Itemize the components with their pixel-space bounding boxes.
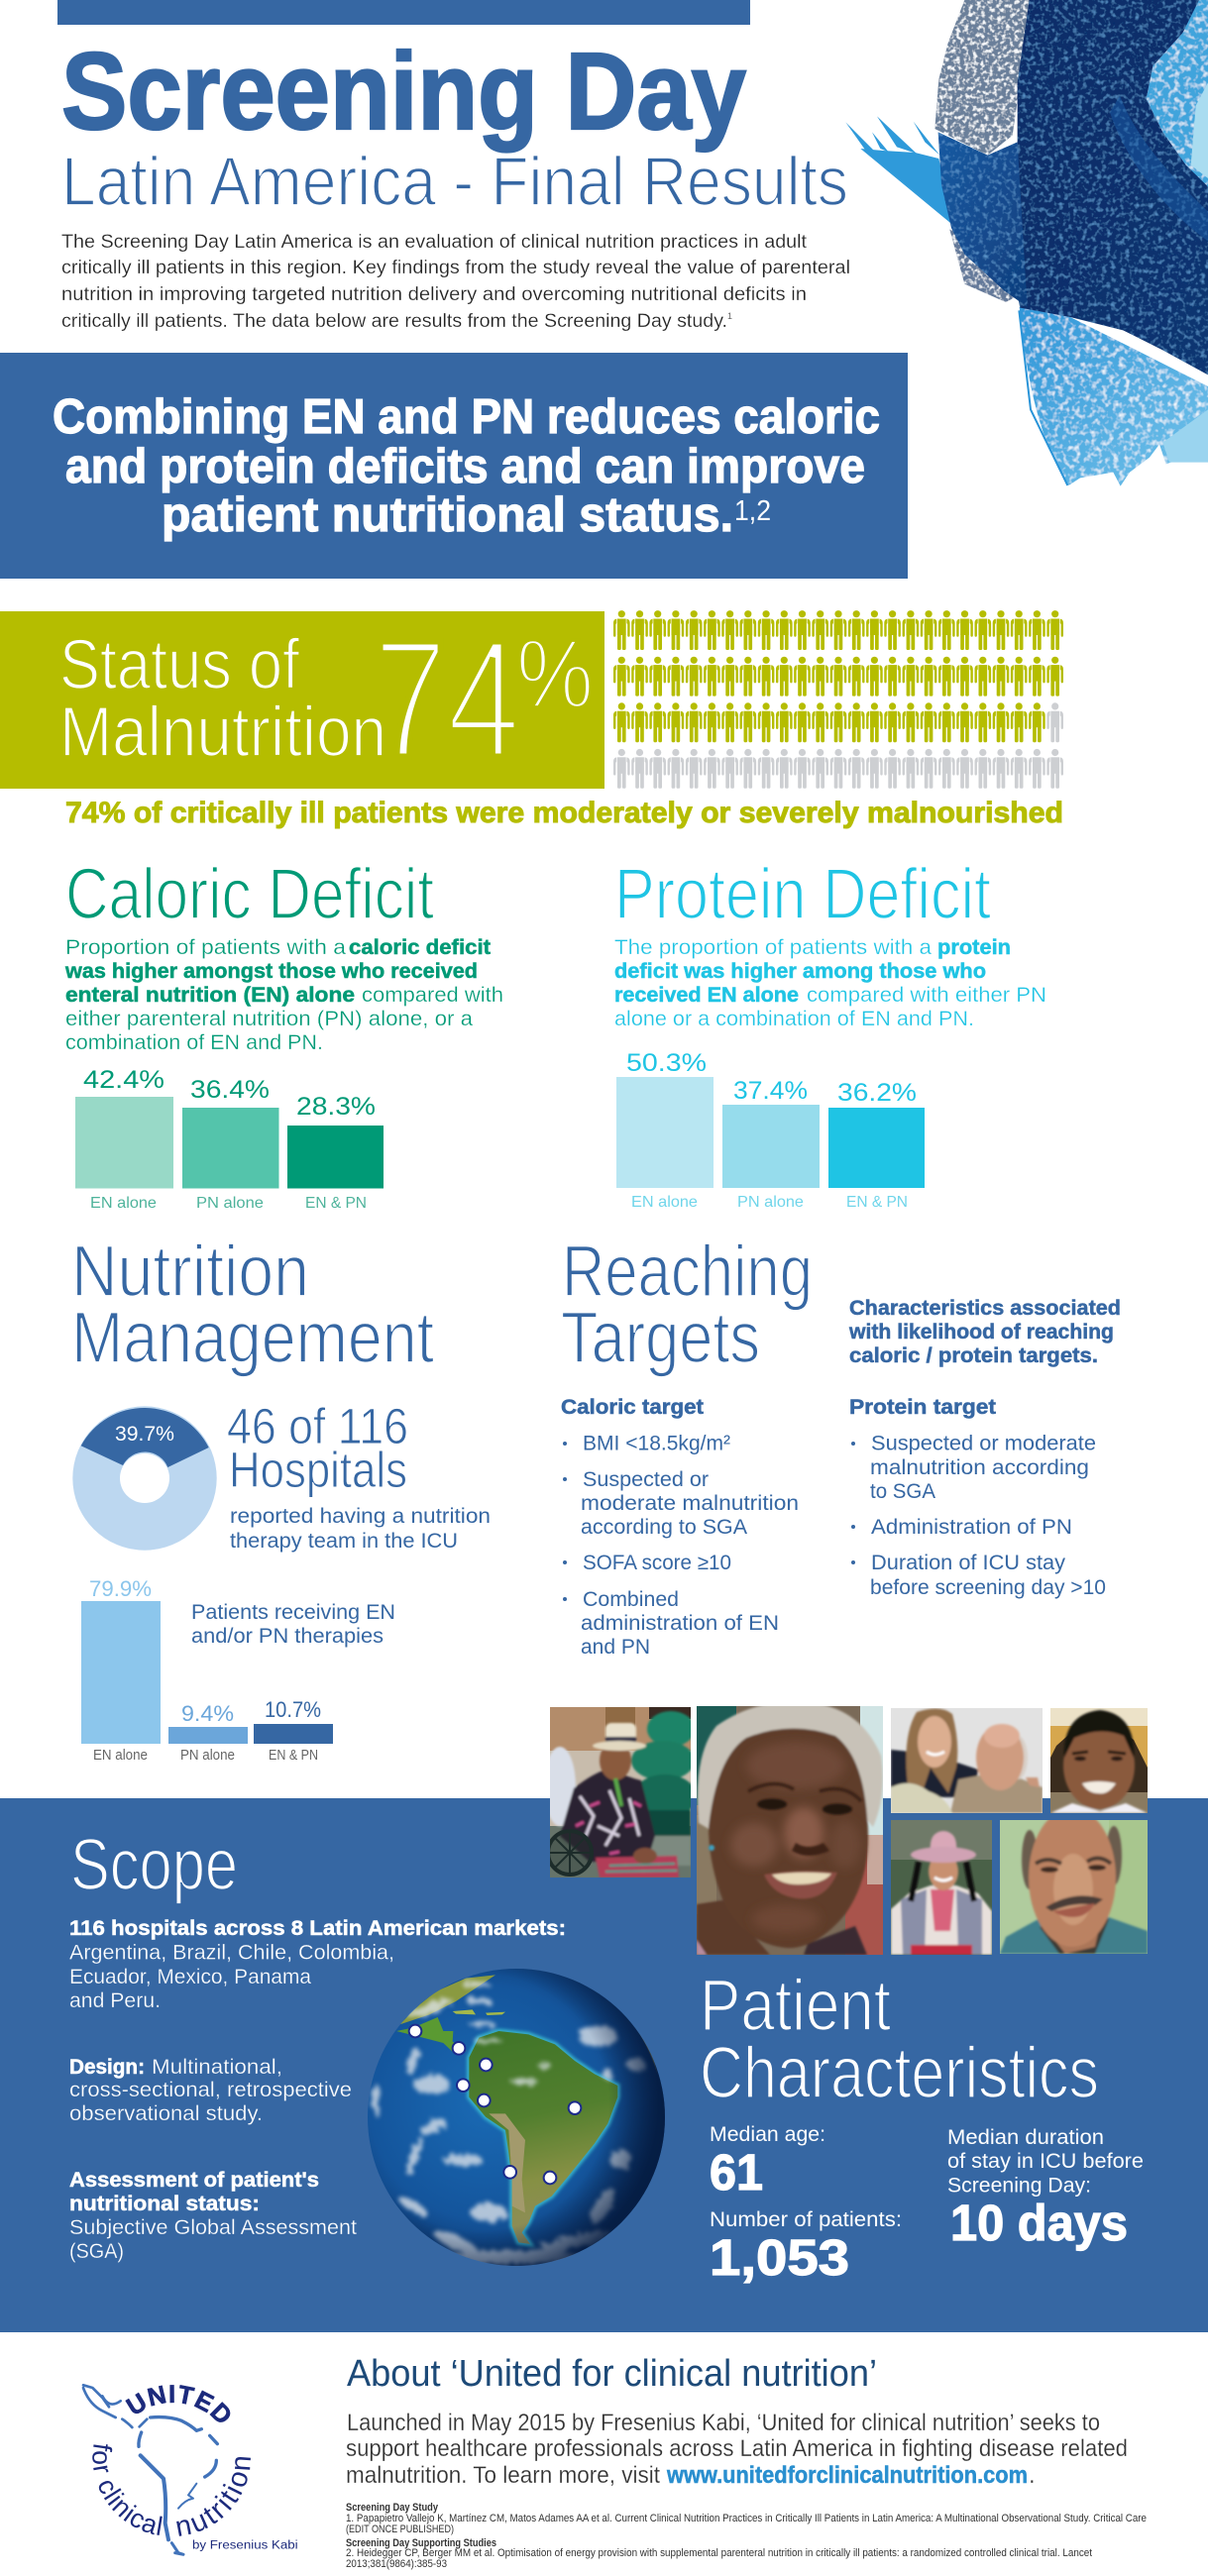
stat: median ICU stay [947, 2126, 1144, 2251]
references: 2. Heidegger CP, Berger MM et al. Optimisation of energy provision with supplemental parenteral nutrition in critically ill patients: a randomized controlled clinical trial. Lancet [346, 2547, 1092, 2559]
globe with market markers [368, 1969, 665, 2266]
scope assessment: Assessment of patient's [69, 2169, 319, 2192]
bar chart: therapies: EN alone [93, 1747, 148, 1764]
logo wordmark: UNITED [125, 2385, 230, 2422]
about text: www.unitedforclinicalnutrition.com [666, 2462, 1028, 2489]
targets intro: with likelihood of reaching [848, 1321, 1114, 1343]
caloric target list [561, 1396, 799, 1659]
panel: caloric deficit [64, 855, 503, 1212]
bar chart: caloric deficit: 28.3% [296, 1093, 376, 1121]
panel: reaching targets [561, 1232, 1121, 1659]
protein deficit text: compared with either PN [807, 984, 1046, 1007]
bar chart: protein deficit: PN alone [737, 1194, 804, 1211]
intro paragraph: The Screening Day Latin America is an evaluation of clinical nutrition practices in adult [61, 232, 808, 253]
stat: number of patients [710, 2208, 902, 2286]
panel: patient characteristics [700, 1966, 1144, 2286]
malnutrition caption: 74% of critically ill patients were moderately or severely malnourished [65, 797, 1063, 829]
panel: nutrition management: Management [71, 1298, 434, 1378]
protein target list: Protein target [849, 1396, 996, 1419]
scope assessment: nutritional status: [69, 2193, 260, 2215]
about text [346, 2410, 1128, 2489]
panel: status of malnutrition: Malnutrition [59, 694, 386, 772]
scope markets [69, 1917, 566, 2012]
hospitals statistic: therapy team in the ICU [230, 1530, 458, 1553]
blue scope band [0, 1798, 1208, 2332]
stat: median age [710, 2123, 825, 2200]
protein target list [849, 1396, 1106, 1599]
bar chart: caloric deficit [75, 1066, 384, 1212]
caloric target list: administration of EN [581, 1612, 779, 1635]
bar chart: protein deficit: 36.2% [837, 1079, 917, 1107]
stat: median age: Median age: [710, 2123, 825, 2146]
therapies caption: Patients receiving EN [191, 1601, 395, 1624]
stat: median ICU stay: Screening Day: [947, 2174, 1091, 2198]
scope design: Multinational, [152, 2056, 282, 2079]
caloric deficit text [64, 936, 503, 1054]
panel: reaching targets: Targets [561, 1298, 760, 1378]
caloric target list: and PN [581, 1636, 650, 1659]
bar chart: protein deficit [616, 1049, 925, 1211]
caloric target list: Combined [583, 1588, 679, 1611]
references: Screening Day Study [346, 2502, 439, 2514]
bar chart: protein deficit: 50.3% [626, 1049, 707, 1077]
panel: reaching targets: Reaching [562, 1232, 813, 1312]
bar chart: protein deficit: EN & PN [846, 1194, 908, 1211]
bar chart: therapies: 10.7% [265, 1697, 321, 1722]
bar chart: therapies: 9.4% [181, 1701, 234, 1726]
protein target list: Suspected or moderate [871, 1433, 1096, 1454]
key message banner: 1,2 [734, 495, 771, 527]
panel: patient characteristics: Patient [700, 1966, 891, 2046]
logo: United for clinical nutrition [81, 2384, 298, 2556]
title: Screening Day [61, 31, 746, 153]
references: (EDIT ONCE PUBLISHED) [346, 2523, 454, 2535]
targets intro: caloric / protein targets. [849, 1344, 1098, 1367]
hospitals statistic [227, 1398, 491, 1553]
protein deficit text [614, 936, 1046, 1030]
intro paragraph [61, 232, 850, 332]
scope design: Design: [69, 2056, 145, 2079]
top accent bar [57, 0, 750, 25]
about text: support healthcare professionals across Latin America in fighting disease related [346, 2435, 1128, 2462]
protein target list: before screening day >10 [870, 1576, 1106, 1599]
about text: malnutrition. To learn more, visit [346, 2462, 660, 2489]
protein deficit text: received EN alone [614, 984, 799, 1007]
pictogram: 74 of 100 patients [613, 610, 1063, 789]
bar chart: caloric deficit: PN alone [196, 1195, 264, 1212]
stat: median age: 61 [710, 2144, 763, 2200]
protein target list: to SGA [870, 1480, 935, 1503]
bar chart: therapies: 79.9% [89, 1576, 152, 1601]
logo wordmark: for clinical [92, 2444, 163, 2535]
panel: scope: Scope [70, 1825, 238, 1905]
caloric target list: Suspected or [583, 1468, 709, 1491]
about text: Launched in May 2015 by Fresenius Kabi, ‘United for clinical nutrition’ seeks to [347, 2410, 1100, 2436]
key message banner: patient nutritional status. [162, 488, 733, 542]
subtitle: Latin America - Final Results [61, 143, 848, 220]
scope design: cross-sectional, retrospective [69, 2079, 352, 2101]
protein target list: malnutrition according [870, 1456, 1089, 1479]
panel: status of malnutrition: Status of [59, 626, 299, 704]
caloric target list: BMI <18.5kg/m² [583, 1433, 730, 1454]
bar chart: protein deficit: 37.4% [733, 1077, 808, 1105]
photo: older man with moustache [1000, 1820, 1148, 1954]
scope design: observational study. [69, 2102, 263, 2125]
stat: median ICU stay: of stay in ICU before [947, 2150, 1144, 2173]
intro paragraph: critically ill patients in this region. Key findings from the study reveal the value of parenteral [61, 258, 850, 278]
scope design [69, 2056, 352, 2125]
caloric deficit text: combination of EN and PN. [65, 1031, 323, 1054]
bar chart: caloric deficit: EN & PN [305, 1195, 367, 1212]
protein deficit text: alone or a combination of EN and PN. [614, 1008, 974, 1030]
logo wordmark [92, 2385, 298, 2552]
scope markets: and Peru. [69, 1989, 161, 2012]
scope assessment: Subjective Global Assessment [69, 2216, 357, 2239]
scope markets: 116 hospitals across 8 Latin American markets: [69, 1917, 566, 1940]
caloric target list: SOFA score ≥10 [583, 1552, 731, 1574]
key message banner: and protein deficits and can improve [65, 440, 865, 493]
donut chart: 39.7%: 39.7% [115, 1423, 174, 1446]
bar chart: protein deficit: EN alone [631, 1194, 698, 1211]
references: Screening Day Supporting Studies [346, 2537, 496, 2549]
intro paragraph: critically ill patients. The data below are results from the Screening Day study. [61, 311, 727, 332]
panel: caloric deficit: Caloric Deficit [65, 855, 434, 934]
logo wordmark: by Fresenius Kabi [192, 2538, 298, 2552]
caloric target list: Caloric target [561, 1396, 704, 1419]
panel: protein deficit [614, 855, 1046, 1211]
references [346, 2502, 1147, 2570]
key message banner [0, 353, 908, 579]
watercolour brush stroke [845, 0, 1208, 486]
photo: man with hat [550, 1707, 691, 1878]
stat: number of patients: Number of patients: [710, 2208, 902, 2231]
references: 2013;381(9864):385-93 [346, 2558, 447, 2570]
targets intro [848, 1297, 1121, 1367]
panel: nutrition management [71, 1232, 491, 1764]
caloric deficit text: Proportion of patients with a [65, 936, 346, 959]
caloric deficit text: compared with [362, 984, 503, 1007]
targets intro: Characteristics associated [849, 1297, 1121, 1320]
stat: number of patients: 1,053 [710, 2229, 849, 2286]
logo map outline [83, 2385, 217, 2554]
protein target list: Administration of PN [871, 1516, 1072, 1539]
title [61, 31, 848, 220]
panel: scope [69, 1825, 566, 2263]
bar chart: therapies [81, 1576, 333, 1764]
hospitals statistic: 46 of 116 [227, 1398, 408, 1454]
heading: about: About ‘United for clinical nutrition’ [347, 2353, 877, 2395]
scope markets: Ecuador, Mexico, Panama [69, 1966, 311, 1988]
bar chart: therapies: EN & PN [269, 1747, 318, 1764]
bar chart: caloric deficit: EN alone [90, 1195, 157, 1212]
caloric target list: moderate malnutrition [581, 1492, 799, 1515]
caloric deficit text: either parenteral nutrition (PN) alone, or a [65, 1008, 473, 1030]
protein target list: Duration of ICU stay [871, 1552, 1066, 1574]
protein deficit text: The proportion of patients with a [614, 936, 932, 959]
stat: median ICU stay: Median duration [947, 2126, 1104, 2149]
therapies caption: and/or PN therapies [191, 1625, 384, 1648]
intro paragraph: 1 [727, 311, 732, 321]
panel: status of malnutrition: 74 [374, 605, 520, 794]
photo: girl in traditional dress [891, 1820, 992, 1955]
caloric deficit text: enteral nutrition (EN) alone [65, 984, 355, 1007]
donut chart: 39.7% [72, 1406, 217, 1551]
hospitals statistic: Hospitals [229, 1442, 407, 1498]
hospitals statistic: reported having a nutrition [230, 1505, 491, 1528]
scope assessment [69, 2169, 357, 2263]
bar chart: therapies: PN alone [180, 1747, 235, 1764]
panel: status of malnutrition: % [516, 619, 594, 728]
logo wordmark: nutrition [176, 2457, 251, 2536]
protein deficit text: protein [937, 936, 1011, 959]
therapies caption [191, 1601, 395, 1648]
photo: smiling woman with white hair [697, 1706, 883, 1955]
bar chart: caloric deficit: 36.4% [190, 1076, 270, 1104]
panel: patient characteristics: Characteristics [700, 2033, 1099, 2113]
scope assessment: (SGA) [69, 2240, 124, 2263]
panel: nutrition management: Nutrition [71, 1232, 309, 1312]
protein deficit text: deficit was higher among those who [614, 960, 986, 983]
panel: protein deficit: Protein Deficit [614, 855, 991, 934]
caloric deficit text: caloric deficit [349, 936, 491, 959]
about text: . [1029, 2462, 1036, 2489]
key message banner: Combining EN and PN reduces caloric [53, 390, 880, 444]
bar chart: caloric deficit: 42.4% [83, 1066, 165, 1094]
caloric deficit text: was higher amongst those who received [64, 960, 478, 983]
stat: median ICU stay: 10 days [950, 2195, 1128, 2251]
intro paragraph: nutrition in improving targeted nutrition delivery and overcoming nutritional deficits in [61, 284, 807, 305]
scope markets: Argentina, Brazil, Chile, Colombia, [69, 1942, 394, 1964]
caloric target list: according to SGA [581, 1516, 747, 1539]
photo: girl with elderly man [891, 1708, 1043, 1813]
photo: smiling young man [1050, 1708, 1148, 1813]
panel: status of malnutrition [0, 605, 604, 794]
